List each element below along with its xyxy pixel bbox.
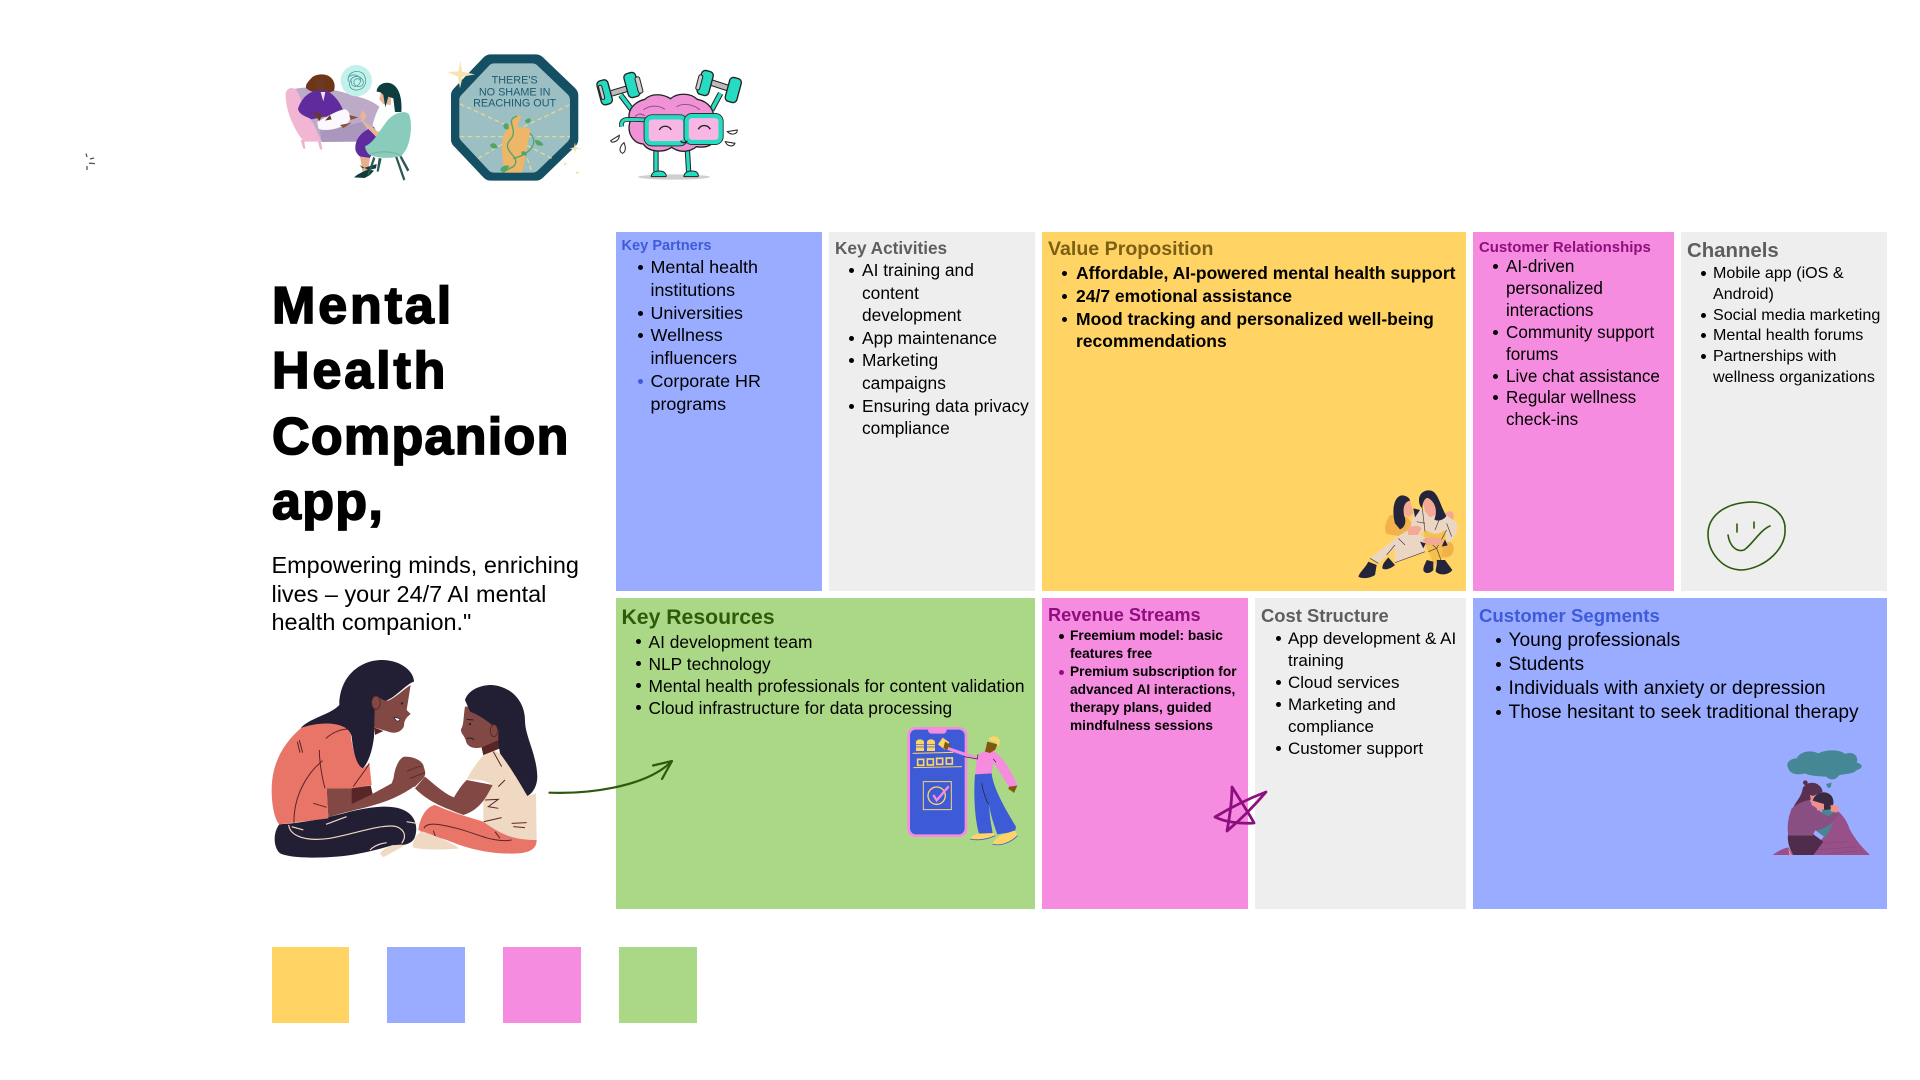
list: value proposition: 24/7 emotional assistance [1076,286,1292,306]
list: value proposition: recommendations [1076,331,1227,351]
heading: key activities: Key Activities [835,238,947,258]
list: key partners: Wellness [650,325,723,345]
list: key partners: influencers [650,348,737,368]
panel: value proposition [1042,232,1466,591]
arrow [550,761,672,793]
list: customer relationships: AI-driven [1506,257,1574,276]
icon: brain lifting dumbbells [596,70,742,180]
list: key activities: Marketing [862,350,938,370]
heading: channels: Channels [1687,240,1779,262]
list: revenue streams: Freemium model: basic [1070,628,1223,643]
list: customer relationships: Community support [1506,323,1654,342]
list: key resources: NLP technology [648,654,771,674]
colour swatches [272,947,697,1023]
badge text: THERE'S [492,74,538,86]
list: customer relationships: interactions [1506,301,1593,320]
panel: customer segments [1472,598,1887,909]
icon: therapy session [286,65,411,181]
list: key partners: Corporate HR [650,371,761,391]
list: revenue streams: features free [1070,646,1152,661]
panel: key resources [616,598,1035,909]
icon: loading spinner [86,154,95,170]
title: Health [272,342,448,400]
title [272,277,570,531]
list: cost structure: App development & AI [1288,629,1456,648]
list: key resources: AI development team [648,632,812,652]
heading: cost structure: Cost Structure [1261,604,1389,626]
icon: badge no shame in reaching out [447,54,582,181]
heading: key resources: Key Resources [622,606,775,629]
subtitle [272,552,579,635]
list: channels: wellness organizations [1713,368,1875,386]
list: revenue streams: mindfulness sessions [1070,718,1213,733]
heading: revenue streams: Revenue Streams [1048,605,1201,625]
list: revenue streams [1059,628,1237,733]
list: customer segments: Young professionals [1508,630,1680,651]
list: customer segments: Students [1508,654,1584,675]
list: revenue streams: Premium subscription for [1070,664,1237,679]
title: Mental [272,277,454,335]
list: key activities [849,260,1029,438]
list: channels [1701,264,1880,386]
list: cost structure: Cloud services [1288,673,1400,692]
list: cost structure: Marketing and [1288,695,1396,714]
list: key partners: institutions [650,280,735,300]
list: cost structure [1276,629,1456,758]
list: key activities: App maintenance [862,328,997,348]
list: channels: Android) [1713,285,1774,303]
list: key activities: content [862,283,919,303]
heading: customer relationships: Customer Relationships [1479,238,1651,256]
list: customer relationships: forums [1506,345,1558,364]
list: key resources [636,632,1025,718]
list: key activities: Ensuring data privacy [862,396,1029,416]
subtitle: lives – your 24/7 AI mental [272,581,546,607]
title: Companion [272,408,570,466]
list: value proposition: Mood tracking and personalized well-being [1076,309,1434,329]
list: key resources: Mental health professionals for content validation [648,676,1025,696]
heading: customer segments: Customer Segments [1479,604,1660,626]
list: key activities: compliance [862,418,950,438]
list: revenue streams: therapy plans, guided [1070,700,1211,715]
list: customer segments [1496,630,1859,723]
list: value proposition [1062,263,1456,351]
list: customer relationships: Live chat assistance [1506,367,1660,386]
heading: key partners: Key Partners [622,238,712,254]
list: customer segments: Those hesitant to seek traditional therapy [1508,702,1859,723]
list: channels: Mental health forums [1713,326,1863,344]
panel: customer relationships [1472,232,1674,591]
list: customer relationships: Regular wellness [1506,388,1636,407]
panel: channels [1680,232,1887,591]
list: key partners: Universities [650,303,743,323]
title: app, [272,473,384,531]
badge text line 2: NO SHAME IN [479,86,550,98]
list: customer relationships [1493,257,1660,429]
list: cost structure: Customer support [1288,739,1423,758]
panel: key partners [616,232,822,591]
list: revenue streams: advanced AI interactions, [1070,682,1235,697]
list: customer relationships: personalized [1506,279,1603,298]
list: key resources: Cloud infrastructure for data processing [648,698,952,718]
list: customer segments: Individuals with anxiety or depression [1508,678,1826,699]
panel: revenue streams [1042,598,1248,909]
list: cost structure: training [1288,651,1344,670]
subtitle: Empowering minds, enriching [272,552,579,578]
illustration: mother and daughter [272,660,537,858]
list: channels: Social media marketing [1713,306,1880,324]
illustration: phone and person [907,727,1018,845]
heading: value proposition: Value Proposition [1048,238,1214,260]
list: cost structure: compliance [1288,717,1374,736]
list: key activities: development [862,305,961,325]
panel: cost structure [1254,598,1466,909]
icon: hand-drawn smiley [1708,502,1785,570]
badge text line 3: REACHING OUT [473,97,557,109]
panel: key activities [828,232,1035,591]
list: key partners [638,257,761,414]
list: key partners: programs [650,394,726,414]
list: channels: Mobile app (iOS & [1713,264,1844,282]
illustration: comforting hug with cloud [1773,750,1870,855]
subtitle: health companion." [272,609,471,635]
list: channels: Partnerships with [1713,347,1836,365]
list: key activities: AI training and [862,260,974,280]
list: customer relationships: check-ins [1506,410,1578,429]
icon: hand-drawn star [1215,787,1266,831]
list: key activities: campaigns [862,373,946,393]
list: key partners: Mental health [650,257,758,277]
illustration: two friends sitting [1358,490,1457,578]
list: value proposition: Affordable, AI-powered mental health support [1076,263,1456,283]
